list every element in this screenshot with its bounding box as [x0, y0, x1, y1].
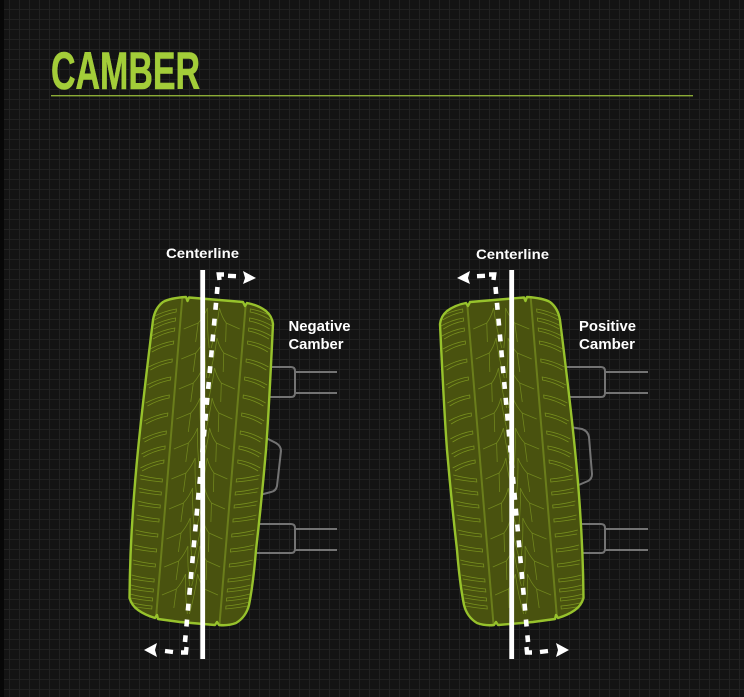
label: positive camber: Positive: [579, 319, 636, 335]
label: negative camber: Camber: [288, 337, 344, 353]
suspension: negative camber: [250, 367, 337, 553]
arrow: tread direction: [457, 271, 569, 657]
tire: positive camber: [438, 290, 586, 635]
centerline: [509, 270, 514, 659]
arrow: tread direction: [144, 271, 256, 657]
label: positive camber: [579, 319, 636, 353]
suspension: positive camber: [560, 367, 648, 553]
label: negative camber: Negative: [288, 319, 350, 335]
title: CAMBER: [51, 42, 200, 101]
centerline: [200, 270, 205, 659]
title underline: [51, 95, 693, 96]
label: centerline: Centerline: [476, 246, 549, 262]
panel: positive camber: [438, 246, 648, 659]
label: positive camber: Camber: [579, 337, 635, 353]
panel: negative camber: [127, 245, 350, 659]
label: negative camber: [288, 319, 350, 353]
label: centerline: Centerline: [166, 245, 239, 261]
tire: negative camber: [127, 290, 275, 635]
